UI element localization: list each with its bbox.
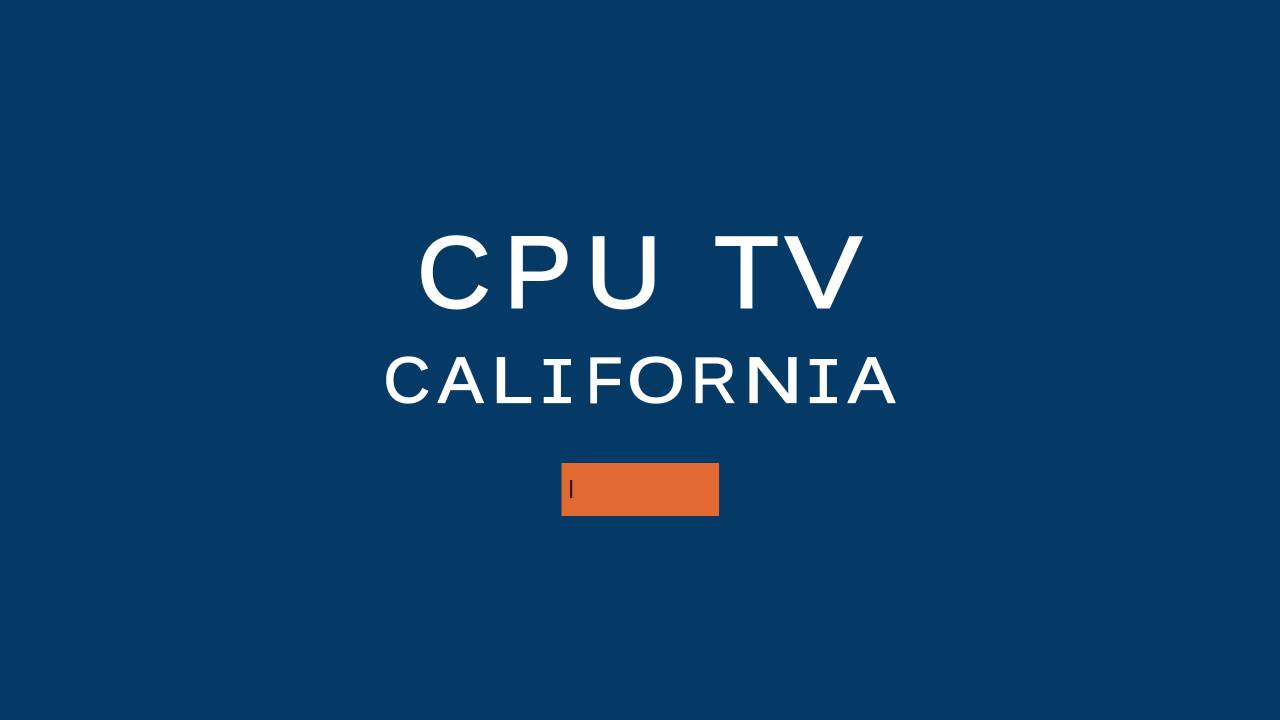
subtitle: CALIFORNIA: A — [438, 344, 483, 416]
subtitle: CALIFORNIA — [384, 344, 895, 422]
subtitle: CALIFORNIA: I — [804, 350, 843, 422]
orange input box with text cursor — [562, 463, 719, 516]
subtitle: CALIFORNIA: L — [491, 344, 533, 416]
subtitle: CALIFORNIA: I — [538, 350, 577, 422]
subtitle: CALIFORNIA: R — [691, 344, 737, 416]
title: CPU TV: C — [417, 216, 491, 330]
title: CPU TV: P — [504, 216, 572, 330]
title: CPU TV: U — [586, 216, 662, 330]
title: CPU TV: V — [785, 216, 862, 330]
subtitle: CALIFORNIA: N — [744, 344, 802, 416]
title: CPU TV — [417, 216, 862, 330]
title: CPU TV: T — [714, 216, 779, 330]
subtitle: CALIFORNIA: F — [586, 344, 622, 416]
subtitle: CALIFORNIA: A — [848, 344, 895, 416]
subtitle: CALIFORNIA: C — [384, 344, 430, 416]
subtitle: CALIFORNIA: O — [627, 344, 685, 416]
text cursor — [570, 480, 572, 498]
